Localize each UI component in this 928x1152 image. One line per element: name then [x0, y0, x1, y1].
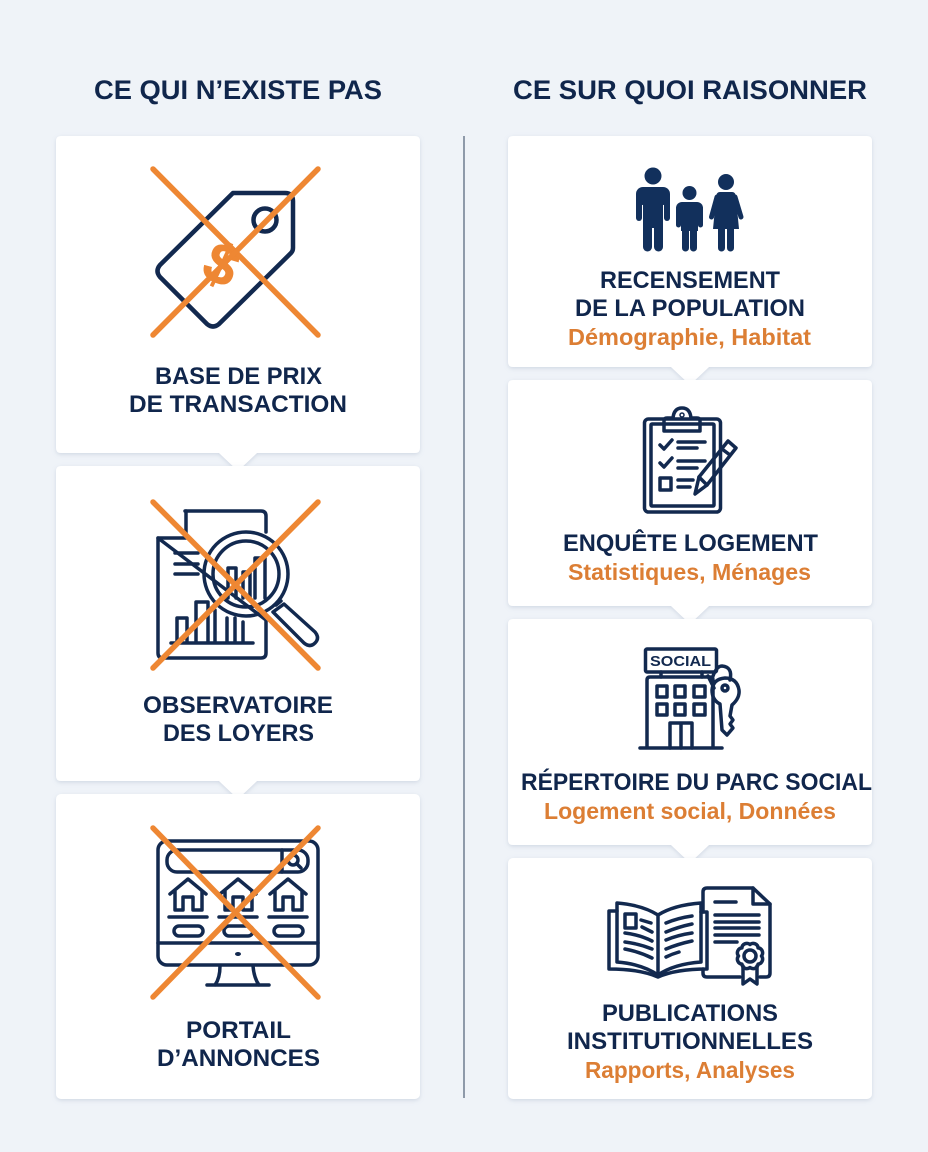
label: ENQUÊTE LOGEMENT — [563, 529, 818, 557]
label: RECENSEMENT — [600, 267, 780, 294]
sublabel: Logement social, Données — [544, 798, 836, 824]
label: RÉPERTOIRE DU PARC SOCIAL — [521, 768, 872, 796]
panel: répertoire du parc social — [508, 619, 872, 863]
panel: enquête logement — [508, 380, 872, 624]
label: DES LOYERS — [163, 720, 314, 747]
label: INSTITUTIONNELLES — [567, 1028, 813, 1055]
label: D’ANNONCES — [157, 1045, 320, 1072]
icon: social housing building with key — [640, 649, 739, 748]
sublabel: Rapports, Analyses — [585, 1057, 795, 1083]
icon: family — [636, 168, 741, 248]
icon: social housing building with key: SOCIAL — [650, 653, 711, 670]
label: DE TRANSACTION — [129, 391, 347, 418]
label: PUBLICATIONS — [602, 1000, 778, 1027]
icon: crossed-out listing portal monitor — [153, 828, 318, 997]
heading: right column: CE SUR QUOI RAISONNER — [513, 75, 867, 105]
label: PORTAIL — [186, 1017, 291, 1044]
heading: left column: CE QUI N’EXISTE PAS — [94, 75, 382, 105]
icon: crossed-out price tag — [153, 169, 318, 335]
panel: observatoire des loyers — [56, 466, 420, 799]
panel: portail d'annonces — [56, 794, 420, 1099]
label: DE LA POPULATION — [575, 295, 805, 322]
panel: recensement de la population — [508, 136, 872, 385]
icon: crossed-out price tag: $ — [194, 229, 249, 301]
column divider — [463, 136, 465, 1098]
icon: crossed-out report with magnifier — [153, 502, 318, 668]
label: BASE DE PRIX — [155, 363, 323, 390]
icon: open book and certified document — [609, 888, 770, 984]
icon: clipboard with pencil — [644, 408, 736, 512]
sublabel: Démographie, Habitat — [568, 324, 811, 350]
sublabel: Statistiques, Ménages — [568, 559, 811, 585]
label: OBSERVATOIRE — [143, 692, 333, 719]
panel: base de prix de transaction — [56, 136, 420, 471]
panel: publications institutionnelles — [508, 858, 872, 1099]
